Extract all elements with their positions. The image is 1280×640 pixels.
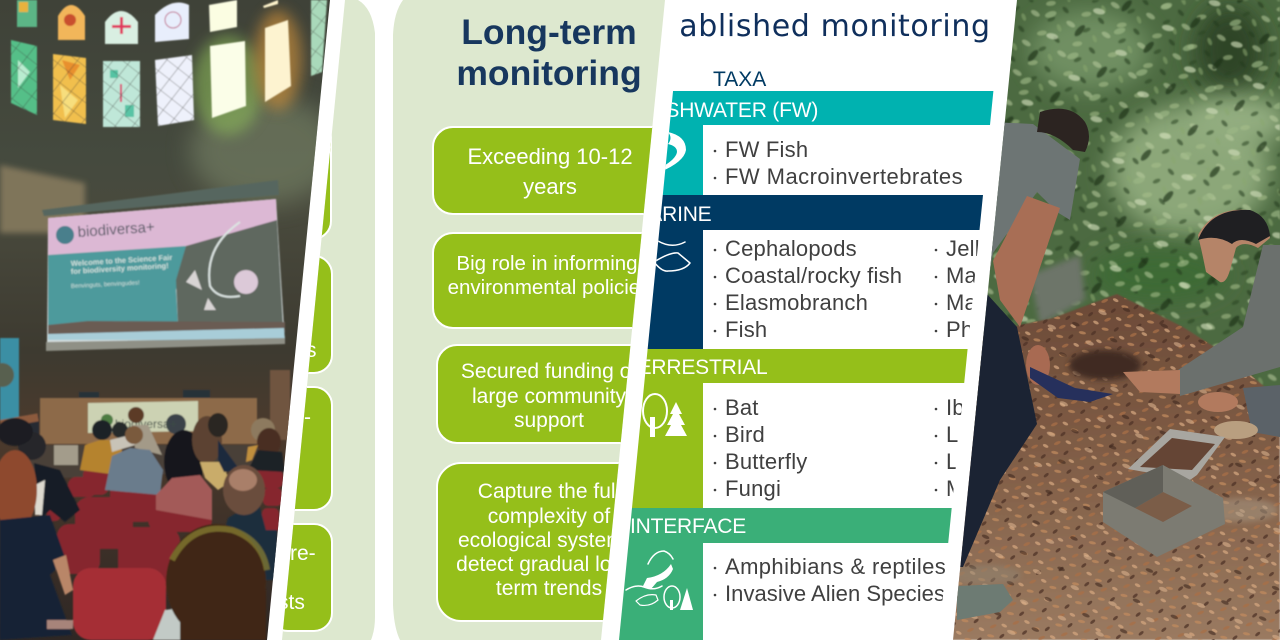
group: freshwater: FRESHWATER (FW) xyxy=(624,99,818,122)
group: terrestrial: Large mammals xyxy=(946,422,1106,447)
metal tray xyxy=(1128,429,1225,480)
label: taxa: TAXA xyxy=(713,68,766,91)
box: exceeding 10-12 years: years xyxy=(523,174,577,199)
criteria box 4: sts xyxy=(278,591,305,614)
group: marine: Macrophytes xyxy=(946,290,1074,315)
heading: long-term monitoring xyxy=(458,20,640,92)
group: interface: Invasive Alien Species xyxy=(725,581,945,606)
criteria box 4: re- xyxy=(290,542,316,565)
photo: researchers sampling leaf litter xyxy=(949,0,1280,640)
projection screen: biodiversa+ xyxy=(77,219,155,241)
panel background xyxy=(393,0,680,640)
box: secured funding: Secured funding of xyxy=(461,360,637,383)
group: interface: Amphibians & reptiles xyxy=(725,554,946,579)
criteria box 3 xyxy=(294,386,333,511)
group: interface: INTERFACE xyxy=(630,515,746,538)
beige wall panelling xyxy=(0,165,85,233)
group: freshwater: FW Macroinvertebrates xyxy=(725,164,963,189)
panel: cropped green criteria column xyxy=(282,0,375,640)
group: marine: Phytoplankton xyxy=(946,317,1088,342)
icon: trees xyxy=(643,394,687,437)
group: marine: Macroalgae xyxy=(946,263,1063,288)
panel: long-term monitoring xyxy=(393,0,665,640)
box: capture the full complexity: detect gradual long- xyxy=(456,553,642,576)
worker standing with shovel xyxy=(950,109,1113,620)
foliage background xyxy=(950,0,1280,430)
group: marine: Coastal/rocky fish xyxy=(725,263,902,288)
icon: landscape, fish and trees xyxy=(626,551,693,610)
criteria box 3: - xyxy=(304,406,311,429)
criteria box 1 xyxy=(322,135,332,238)
stained-glass windows xyxy=(11,0,327,127)
audience chairs xyxy=(47,467,283,640)
box: capture the full complexity: complexity of xyxy=(488,505,610,528)
box: capture the full complexity: term trends xyxy=(496,577,602,600)
square metal frame xyxy=(1103,465,1225,557)
group: freshwater: FW Fish xyxy=(725,137,808,162)
group: terrestrial: Bat xyxy=(725,395,759,420)
criteria box 2 xyxy=(308,256,333,374)
box: exceeding 10-12 years xyxy=(432,126,652,215)
audience members xyxy=(0,407,285,640)
group: terrestrial: Butterfly xyxy=(725,449,808,474)
box: big role in informing policies: Big role in informing xyxy=(456,252,638,275)
stage desk with banners xyxy=(0,338,290,480)
leaf-litter ground xyxy=(949,294,1280,640)
group: marine: Jellyfish xyxy=(946,236,1026,261)
group: marine: Fish xyxy=(725,317,767,342)
box: exceeding 10-12 years: Exceeding 10-12 xyxy=(467,144,633,169)
criteria box 4 xyxy=(283,523,333,632)
box: secured funding: support xyxy=(514,409,584,432)
panel background xyxy=(282,0,375,640)
heading: established monitoring: Established monitoring xyxy=(631,9,990,44)
group: marine xyxy=(648,195,983,349)
heading: long-term monitoring: monitoring xyxy=(456,53,642,93)
group: freshwater xyxy=(662,91,994,195)
box: capture the full complexity: Capture the full xyxy=(478,480,620,503)
group: marine: Elasmobranch xyxy=(725,290,868,315)
group: terrestrial: Lichen xyxy=(946,449,1012,474)
box: secured funding xyxy=(436,344,630,444)
projection screen: Welcome to the Science Fair xyxy=(71,253,173,268)
group: marine: Cephalopods xyxy=(725,236,857,261)
projection screen: Benvinguts, benvingudes! xyxy=(71,280,140,290)
group: terrestrial: TERRESTRIAL xyxy=(625,356,768,379)
box: capture the full complexity: ecological systems, xyxy=(458,529,640,552)
worker crouching xyxy=(1123,210,1280,439)
group: terrestrial: Moth xyxy=(946,476,996,501)
projection screen: for biodiversity monitoring! xyxy=(71,261,169,276)
box: capture the full complexity xyxy=(436,462,619,622)
box: secured funding: large community xyxy=(472,385,627,408)
group: terrestrial: Bird xyxy=(725,422,765,447)
projection screen xyxy=(42,180,285,351)
heading: long-term monitoring: Long-term xyxy=(461,12,637,52)
box: big role in informing policies: environmental policies xyxy=(448,276,650,299)
icon: river xyxy=(665,132,686,170)
group: marine: MARINE xyxy=(631,203,712,226)
icon: wave and fish xyxy=(654,241,690,271)
stage desk with banners: biodiversa+ xyxy=(115,417,177,431)
photo: conference audience under stained-glass windows xyxy=(0,0,340,640)
rock behind worker xyxy=(1030,255,1085,325)
group: terrestrial xyxy=(632,349,968,508)
group: terrestrial: Fungi xyxy=(725,476,781,501)
criteria box 2: s xyxy=(306,339,316,362)
panel: established monitoring taxa xyxy=(619,13,994,640)
group: interface xyxy=(619,508,952,640)
group: terrestrial: Ibex xyxy=(946,395,988,420)
box: big role in informing policies xyxy=(432,232,642,329)
